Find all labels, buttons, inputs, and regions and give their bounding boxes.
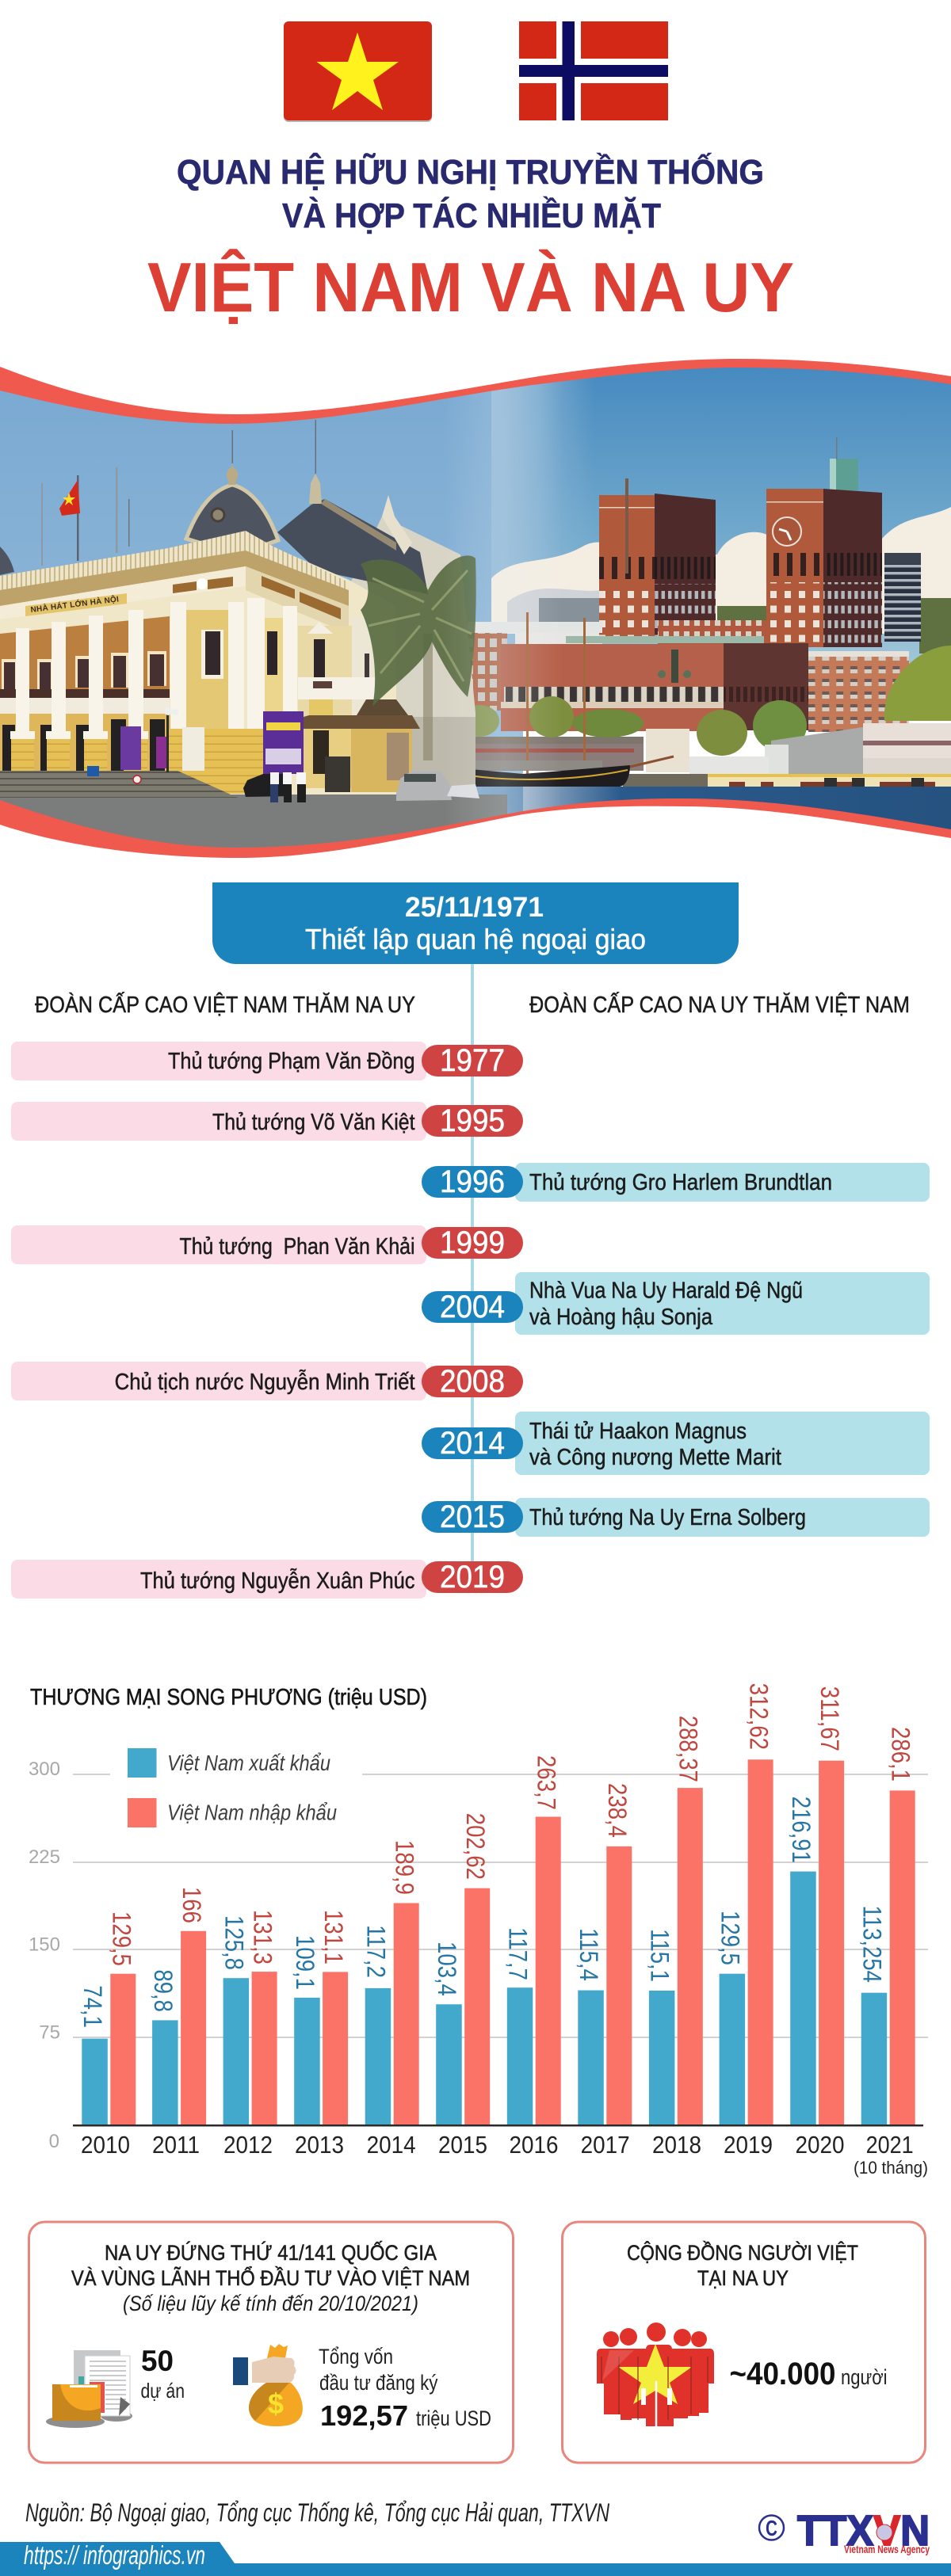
y axis labels: 150 xyxy=(29,1934,60,1955)
visit 2019: Thủ tướng Nguyễn Xuân Phúc xyxy=(140,1568,415,1594)
export value labels xyxy=(78,1797,886,2028)
export value labels: 117,2 xyxy=(361,1925,390,1978)
year axis labels: 2020 xyxy=(796,2131,845,2159)
year axis labels: 2012 xyxy=(223,2131,273,2159)
tower: left xyxy=(599,478,716,642)
flag: Norway xyxy=(519,21,668,120)
visit 2014: 2014 xyxy=(440,1426,505,1461)
timeline axis xyxy=(471,964,474,1586)
panel heading: investment rank: NA UY ĐỨNG THỨ 41/141 QUỐC GIA xyxy=(105,2239,437,2265)
panel heading: community: CỘNG ĐỒNG NGƯỜI VIỆT xyxy=(627,2240,858,2265)
year axis labels: (10 tháng) xyxy=(854,2158,928,2178)
export value labels: 115,1 xyxy=(645,1929,674,1982)
visit 2015: 2015 xyxy=(440,1499,505,1534)
icon: people with flag star xyxy=(597,2323,714,2426)
import value labels: 129,5 xyxy=(107,1911,136,1966)
palm xyxy=(361,555,476,760)
import value labels: 131,3 xyxy=(248,1910,277,1964)
stat: registered capital: triệu USD xyxy=(416,2406,491,2430)
panel heading: investment rank: VÀ VÙNG LÃNH THỔ ĐẦU TƯ VÀO VIỆT NAM xyxy=(71,2265,470,2290)
building: grey quay house xyxy=(432,729,689,772)
stat: registered capital: Tổng vốn xyxy=(319,2345,393,2368)
title xyxy=(147,151,794,326)
import value labels: 202,62 xyxy=(460,1813,489,1880)
icon: documents and folder xyxy=(46,2350,132,2428)
stat: 40,000 people: ~40.000 xyxy=(729,2357,835,2391)
year axis labels: 2013 xyxy=(295,2131,344,2159)
legend xyxy=(128,1748,337,1827)
visit 1996 xyxy=(422,1163,930,1202)
canopy xyxy=(304,699,420,792)
wave: bottom red band xyxy=(0,798,951,871)
wave: top red band xyxy=(0,341,951,424)
legend: Việt Nam nhập khẩu xyxy=(167,1800,337,1825)
stat: 50 projects xyxy=(141,2345,185,2403)
visit 2014: Thái tử Haakon Magnus xyxy=(529,1419,747,1444)
façade xyxy=(0,539,396,795)
car and people xyxy=(243,771,479,802)
building: City Hall main block xyxy=(501,636,808,731)
stat: 40,000 people: người xyxy=(841,2365,888,2389)
panel heading: investment rank xyxy=(71,2239,470,2315)
year axis labels: 2010 xyxy=(81,2131,130,2159)
visit 1996: Thủ tướng Gro Harlem Brundtlan xyxy=(529,1170,832,1195)
ship xyxy=(462,612,674,787)
year axis labels: 2017 xyxy=(581,2131,630,2159)
right wall xyxy=(185,610,377,733)
visit 2004: Nhà Vua Na Uy Harald Đệ Ngũ xyxy=(529,1278,803,1304)
timeline banner: Thiết lập quan hệ ngoại giao xyxy=(305,923,646,955)
y axis labels: 225 xyxy=(29,1846,60,1868)
visit 1999 xyxy=(11,1225,523,1264)
visit 2008: 2008 xyxy=(440,1364,505,1399)
visit 1977 xyxy=(11,1042,523,1080)
export value labels: 216,91 xyxy=(786,1797,815,1863)
building: quay sheds xyxy=(765,723,951,776)
import value labels: 166 xyxy=(177,1887,205,1923)
visit 2019: 2019 xyxy=(440,1560,505,1595)
export bars xyxy=(82,1872,887,2125)
pier xyxy=(623,774,951,795)
year axis labels: 2014 xyxy=(367,2131,416,2159)
building: right brick block xyxy=(808,651,909,732)
stat: registered capital xyxy=(319,2345,491,2432)
y axis labels: 300 xyxy=(29,1759,60,1780)
import value labels: 288,37 xyxy=(674,1716,702,1782)
export value labels: 125,8 xyxy=(220,1915,248,1970)
posters and signs xyxy=(87,707,304,783)
year axis labels: 2015 xyxy=(438,2131,487,2159)
export value labels: 113,254 xyxy=(857,1905,886,1983)
visit 2004 xyxy=(422,1272,930,1335)
panel heading: community xyxy=(627,2240,858,2290)
visit 2008 xyxy=(11,1362,523,1400)
y axis labels: 0 xyxy=(49,2131,59,2152)
flag: Vietnam xyxy=(284,21,432,122)
year axis labels: 2011 xyxy=(152,2131,200,2159)
timeline banner: 25/11/1971 xyxy=(405,892,544,923)
visit 2015 xyxy=(422,1498,930,1537)
visit 2015: Thủ tướng Na Uy Erna Solberg xyxy=(529,1505,806,1530)
visit 2008: Chủ tịch nước Nguyễn Minh Triết xyxy=(115,1369,415,1395)
icon: hand holding money bag: $ xyxy=(268,2387,284,2420)
import value labels: 263,7 xyxy=(532,1755,560,1810)
stat: registered capital: đầu tư đăng ký xyxy=(319,2371,438,2395)
bar chart: bilateral trade xyxy=(29,1683,928,2178)
import value labels: 312,62 xyxy=(744,1683,773,1750)
visit 2004: và Hoàng hậu Sonja xyxy=(529,1305,713,1330)
title: QUAN HỆ HỮU NGHỊ TRUYỀN THỐNG xyxy=(177,151,764,192)
source note: Nguồn: Bộ Ngoại giao, Tổng cục Thống kê, Tổng cục Hải quan, TTXVN xyxy=(25,2498,610,2527)
stat: 50 projects: 50 xyxy=(141,2345,174,2377)
visit 1995: Thủ tướng Võ Văn Kiệt xyxy=(212,1110,415,1135)
logo: TTXVN: TTXVN xyxy=(797,2507,930,2555)
timeline banner xyxy=(212,882,739,964)
import value labels: 311,67 xyxy=(815,1686,843,1751)
tower: right with clock xyxy=(766,437,882,647)
title: VÀ HỢP TÁC NHIỀU MẶT xyxy=(282,196,661,235)
side wing behind palm xyxy=(349,516,476,792)
panel: investment xyxy=(29,2222,514,2463)
stat: registered capital: 192,57 xyxy=(320,2399,408,2432)
year axis labels: 2018 xyxy=(652,2131,701,2159)
visit 1999: Thủ tướng Phan Văn Khải xyxy=(179,1234,415,1259)
columns xyxy=(10,598,297,739)
visit 2004: 2004 xyxy=(440,1290,505,1324)
opera house: NHÀ HÁT LỚN HÀ NỘI xyxy=(30,593,120,615)
y axis labels: 75 xyxy=(39,2022,60,2044)
front bays xyxy=(0,616,176,771)
visit 2014: và Công nương Mette Marit xyxy=(529,1445,781,1470)
footer bar with website xyxy=(0,2540,951,2576)
year axis labels: 2016 xyxy=(509,2131,558,2159)
export value labels: 89,8 xyxy=(148,1969,177,2012)
visit 2014 xyxy=(422,1412,930,1475)
title: VIỆT NAM VÀ NA UY xyxy=(147,248,794,326)
import value labels: 286,1 xyxy=(886,1727,915,1781)
chart title: THƯƠNG MẠI SONG PHƯƠNG (triệu USD) xyxy=(30,1685,427,1710)
visit 1977: 1977 xyxy=(440,1043,505,1078)
export value labels: 74,1 xyxy=(78,1985,106,2028)
export value labels: 129,5 xyxy=(716,1911,744,1965)
export value labels: 103,4 xyxy=(432,1942,460,1996)
import bars xyxy=(110,1759,915,2125)
column heading: Vietnam visits: ĐOÀN CẤP CAO VIỆT NAM THĂM NA UY xyxy=(35,991,415,1018)
import value labels: 238,4 xyxy=(602,1783,631,1838)
visit 1999: 1999 xyxy=(440,1225,505,1260)
opera house xyxy=(0,420,507,866)
visit 2019 xyxy=(11,1560,523,1599)
panel heading: investment rank: (Số liệu lũy kế tính đến 20/10/2021) xyxy=(123,2292,418,2315)
icon: hand holding money bag xyxy=(233,2344,303,2426)
visit 1996: 1996 xyxy=(440,1164,505,1199)
import value labels: 131,1 xyxy=(319,1910,347,1964)
stat: 50 projects: dự án xyxy=(141,2379,185,2403)
import value labels xyxy=(107,1683,915,1966)
visit 1977: Thủ tướng Phạm Văn Đồng xyxy=(168,1049,415,1074)
logo: TTXVN: C xyxy=(766,2516,777,2540)
plinths xyxy=(11,729,264,794)
import value labels: 189,9 xyxy=(390,1840,418,1895)
visit 1995 xyxy=(11,1102,523,1141)
export value labels: 115,4 xyxy=(574,1928,602,1981)
footer bar with website: https:// infographics.vn xyxy=(24,2540,205,2570)
roofs xyxy=(186,463,428,594)
flag pole and poles xyxy=(41,420,316,566)
trees xyxy=(460,646,951,756)
export value labels: 109,1 xyxy=(290,1935,319,1990)
export value labels: 117,7 xyxy=(503,1927,532,1980)
year axis labels: 2019 xyxy=(724,2131,773,2159)
panel: Vietnamese community xyxy=(563,2222,926,2463)
visit 1995: 1995 xyxy=(440,1103,505,1138)
year axis labels: 2021 xyxy=(866,2131,914,2159)
y axis labels xyxy=(29,1759,60,2152)
panel heading: community: TẠI NA UY xyxy=(697,2266,789,2290)
legend: Việt Nam xuất khẩu xyxy=(167,1751,330,1775)
photo: Oslo skyline xyxy=(0,360,951,866)
year axis labels xyxy=(81,2131,928,2178)
